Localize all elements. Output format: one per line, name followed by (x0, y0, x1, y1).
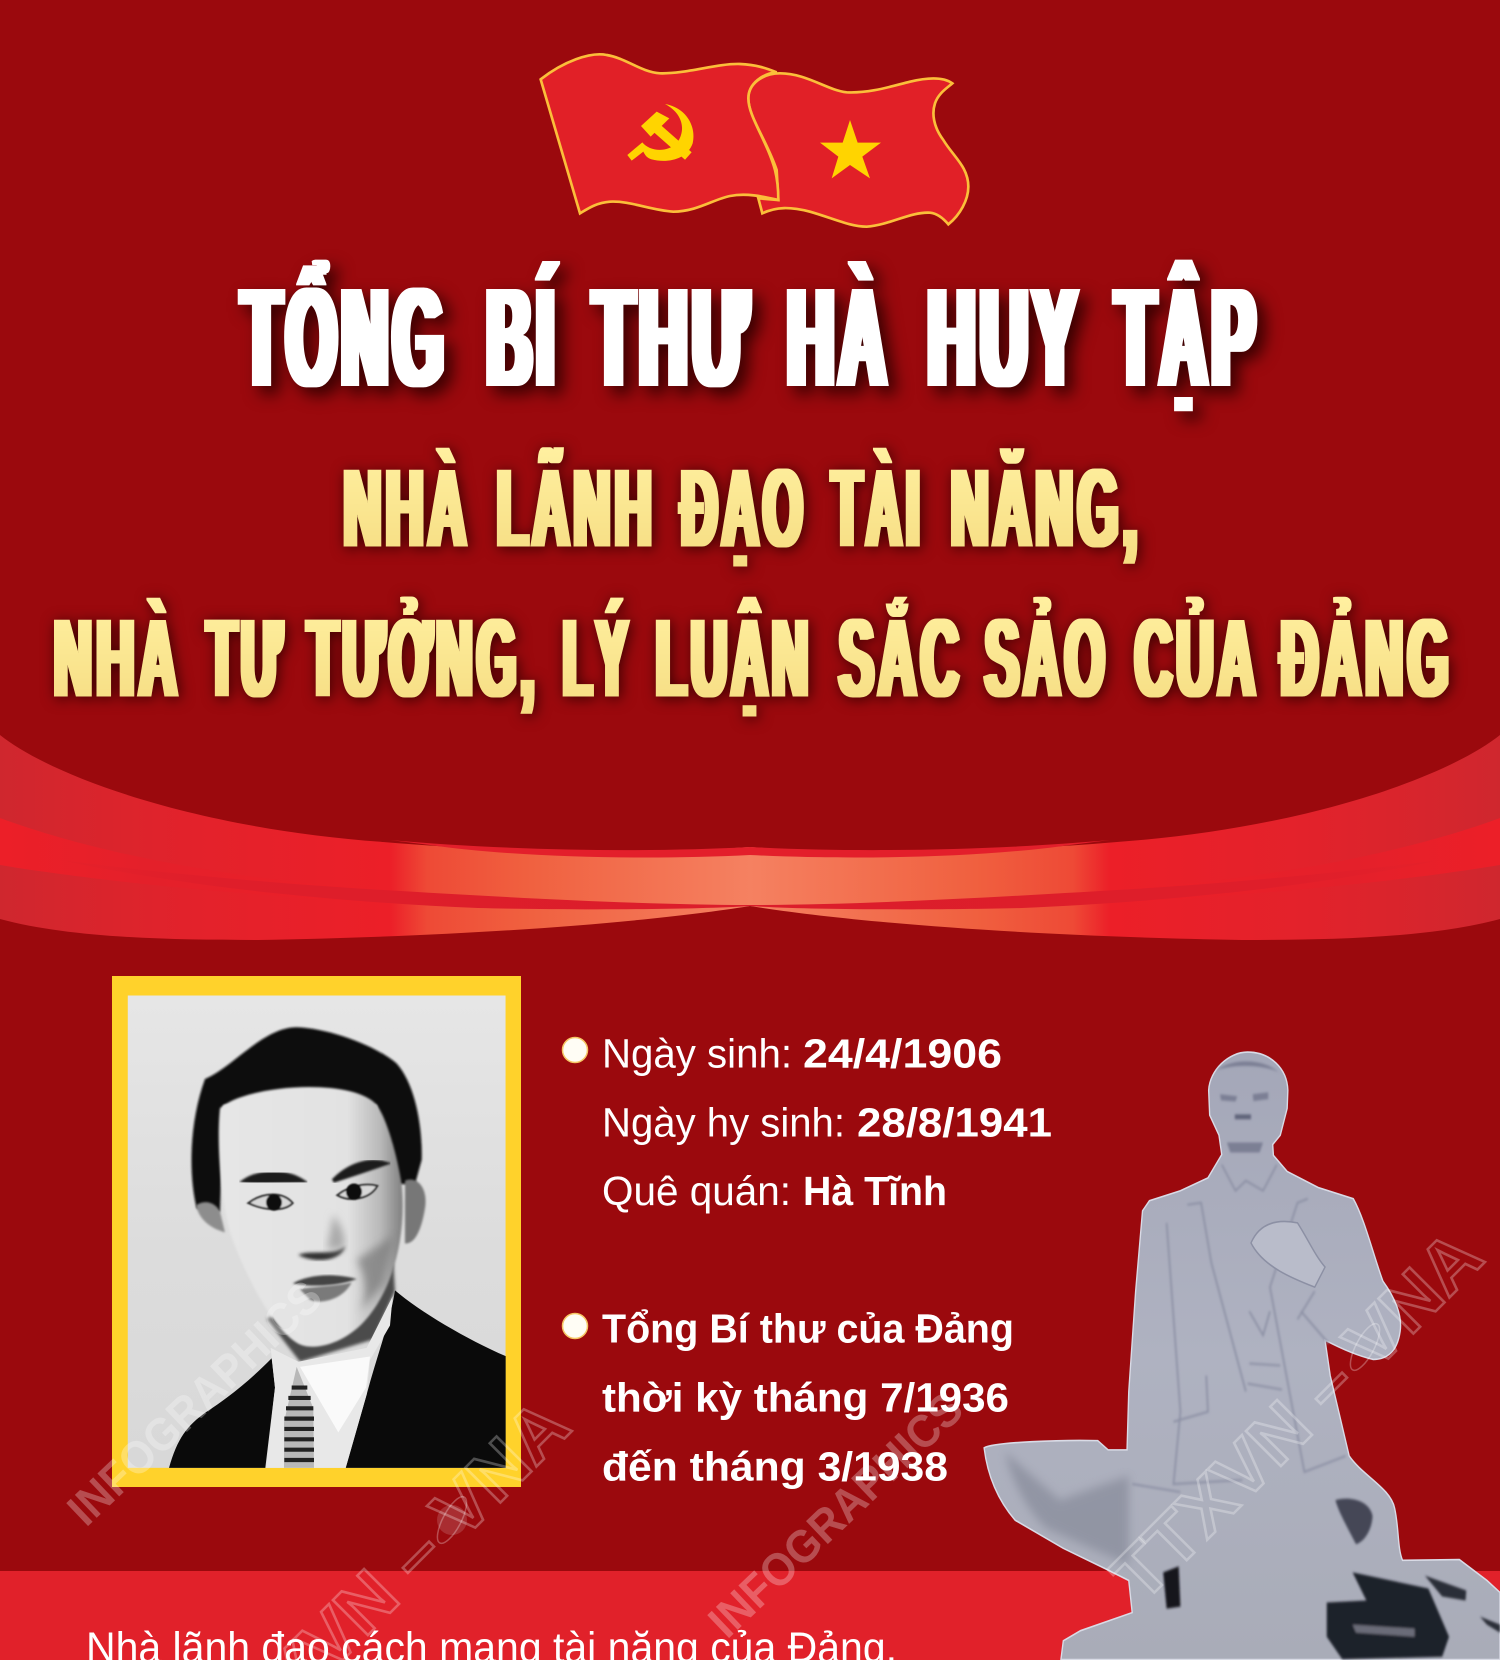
portrait frame (112, 976, 521, 1487)
death date: Ngày hy sinh: (602, 1100, 845, 1146)
hair (191, 1027, 422, 1212)
subtitle line 1: TÀI (832, 446, 924, 570)
neck shadow (267, 1263, 395, 1362)
bottom red band (0, 1571, 1500, 1660)
national flag with star (748, 73, 968, 227)
eyebrows (245, 1173, 302, 1181)
cape shading (1005, 1452, 1129, 1564)
shirt (266, 1296, 393, 1470)
subtitle line 2: TƯ (207, 596, 286, 720)
face (219, 1087, 403, 1347)
lips (293, 1275, 357, 1286)
line 2: thời kỳ tháng 7/1936 (602, 1374, 1009, 1420)
tie (284, 1367, 314, 1470)
subtitle line 2: LÝ (563, 596, 632, 720)
birth date: Ngày sinh: (602, 1030, 792, 1076)
coat lines (1132, 1165, 1346, 1492)
bullet (562, 1038, 588, 1062)
hometown: Quê quán: (602, 1168, 791, 1214)
subtitle line 1: LÃNH (497, 446, 656, 570)
title: main heading: TỔNG (242, 258, 448, 416)
title: main heading: HUY (928, 258, 1082, 416)
title: main heading: THƯ (594, 258, 753, 416)
subtitle line 1: ĐẠO (681, 446, 807, 570)
subtitle line 2: CỦA (1135, 596, 1260, 720)
subtitle line 2: TƯỞNG, (308, 596, 539, 720)
subtitle line 1 (344, 446, 1142, 570)
subtitle line 2: NHÀ (54, 596, 182, 720)
watermark: INFOGRAPHICS left: INFOGRAPHICS (57, 1270, 332, 1535)
subtitle line 2: SẮC (839, 596, 963, 720)
dark recesses in the base (1163, 1499, 1500, 1659)
line 3: đến tháng 3/1938 (602, 1444, 948, 1490)
watermark: TTXVN - VNA right: TTXVN – VNA (1097, 1215, 1498, 1616)
suit right (345, 1290, 507, 1470)
hand (1251, 1221, 1325, 1287)
face shading (1217, 1061, 1279, 1153)
title: main heading (242, 258, 1260, 416)
flags: Party flag and national flag (541, 54, 968, 227)
info list: birth, death, hometown: 24/4/1906 (803, 1030, 1002, 1076)
suit left (168, 1358, 275, 1470)
title: main heading: BÍ (487, 258, 559, 416)
text: TẬP (1116, 258, 1260, 416)
text: NĂNG, (951, 446, 1142, 570)
eyes (248, 1183, 377, 1211)
subtitle line 2 (54, 596, 1453, 720)
info list: birth, death, hometown (562, 1030, 1052, 1214)
info list: birth, death, hometown: Hà Tĩnh (803, 1168, 947, 1214)
info list: term as General Secretary (562, 1306, 1014, 1490)
subtitle line 2: LUẬN (656, 596, 813, 720)
statue silhouette (984, 1052, 1500, 1660)
title: main heading: HÀ (788, 258, 891, 416)
bullet (562, 1314, 588, 1338)
watermark: INFOGRAPHICS centre: INFOGRAPHICS (698, 1382, 973, 1647)
ears (196, 1202, 225, 1232)
party flag with hammer and sickle (541, 54, 778, 213)
statue (984, 1052, 1500, 1660)
line 1: Tổng Bí thư của Đảng (602, 1306, 1014, 1352)
info list: birth, death, hometown: 28/8/1941 (857, 1100, 1052, 1146)
ribbon divider (0, 735, 1500, 940)
nose shadow (298, 1246, 345, 1260)
portrait photo (128, 996, 507, 1470)
subtitle line 2: SẢO (985, 596, 1109, 720)
subtitle line 1: NHÀ (344, 446, 471, 570)
